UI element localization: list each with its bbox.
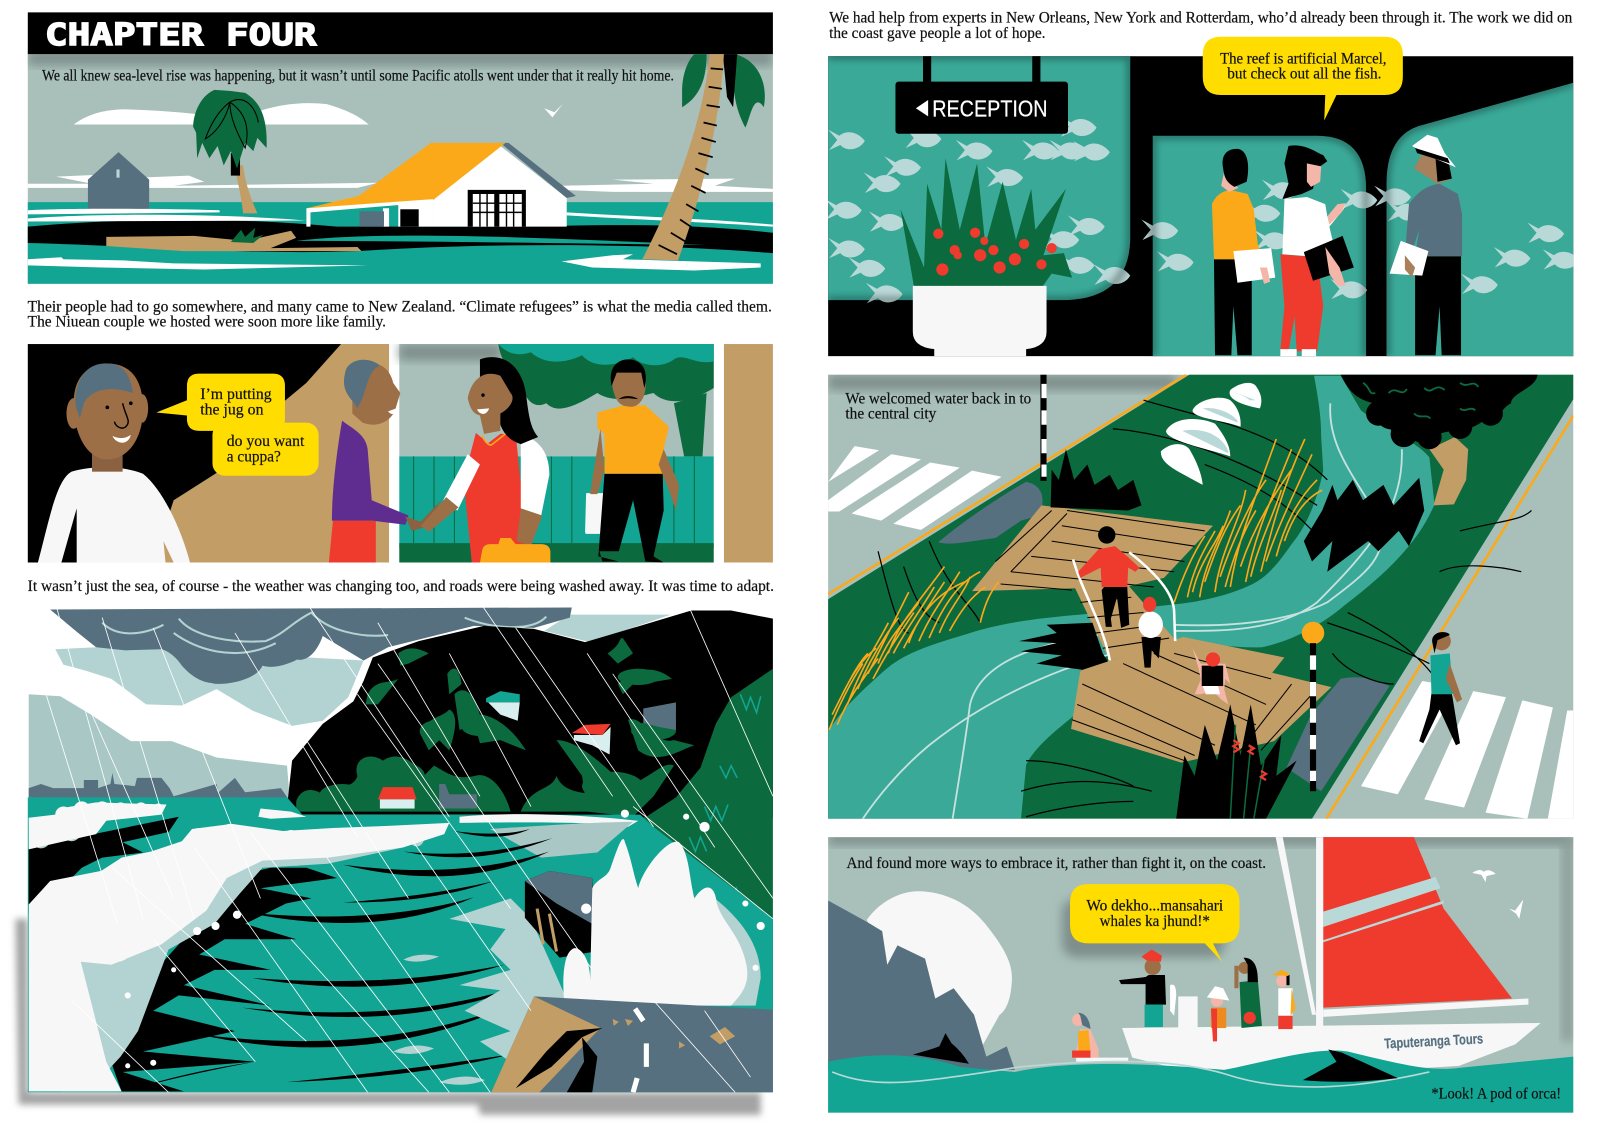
sea [28, 797, 773, 1092]
boy in yellow cap [1272, 970, 1296, 1029]
large palm tree [642, 54, 765, 260]
kitchen wall [153, 344, 389, 563]
tree [1341, 375, 1538, 505]
reception sign: RECEPTION [932, 95, 1048, 121]
caption: embrace it: And found more ways to embrace it, rather than fight it, on the coast. [846, 855, 1266, 872]
winding river [828, 376, 1434, 819]
caption: help from experts: the coast gave people a lot of hope. [829, 25, 1046, 42]
seagulls [1472, 870, 1523, 919]
chapter title [28, 12, 773, 54]
pale sea foam [393, 898, 572, 1092]
bush foliage [296, 638, 694, 817]
woman in purple [329, 360, 441, 563]
speech bubble: orca pod: whales ka jhund!* [1100, 913, 1210, 930]
flood current [28, 220, 773, 253]
panel: hosting the Niuean couple [28, 344, 773, 563]
fish school [825, 116, 1579, 303]
rain streaks [46, 602, 773, 1092]
toddler [1193, 648, 1230, 704]
sail and rigging [1275, 835, 1528, 1031]
moon [867, 891, 1012, 1052]
city skyline [29, 773, 290, 801]
river current lines [863, 403, 1402, 819]
caption: time to adapt: It wasn’t just the sea, of course - the weather was changing too, and roads were being washed away. It was time to adapt. [28, 578, 774, 595]
speech bubble: putting the jug on: I’m putting [200, 386, 272, 403]
stormwater ponds [938, 482, 1390, 791]
street bollards [1040, 375, 1324, 791]
chapter title: CHAPTER FOUR [45, 18, 317, 53]
white door frames [389, 344, 390, 562]
man in white hat [1390, 135, 1462, 355]
man in orange shirt [1212, 149, 1275, 355]
caption: help from experts: We had help from experts in New Orleans, New York and Rotterdam, who’d already been through it. The work we did on [829, 9, 1573, 26]
green park [828, 375, 1573, 819]
golden grasses [829, 439, 1322, 730]
panel: water in the central city [828, 375, 1573, 819]
reception sign [895, 56, 1068, 134]
panel: artificial reef reception [825, 56, 1579, 356]
caption: sea-level rise: We all knew sea-level rise was happening, but it wasn’t until some Pacific atolls went under that it really hit home. [42, 68, 674, 85]
right orca [1303, 1049, 1398, 1082]
caption: welcomed water back: the central city [845, 406, 937, 423]
speech bubble: artificial reef: but check out all the fish. [1227, 66, 1381, 83]
speech bubble: cuppa [212, 423, 319, 476]
aquarium windows [828, 56, 1573, 356]
hillside houses [378, 691, 676, 809]
child in white [1138, 597, 1163, 668]
caption: welcomed water back: We welcomed water back in to [845, 390, 1032, 407]
woman in green [1234, 958, 1262, 1028]
panel: coastal orca tour [828, 833, 1573, 1113]
green shore hillside [644, 669, 773, 1010]
sea spray [125, 810, 765, 1068]
flooded house [306, 143, 576, 227]
shore foam [258, 809, 638, 827]
kerb lines [828, 375, 1573, 819]
panel shadow: storm [15, 919, 761, 1115]
white foam crests [29, 801, 449, 1091]
boardwalk [972, 505, 1331, 763]
man in red shirt [1078, 526, 1139, 628]
pointing guide [1119, 949, 1176, 1027]
speech bubble: orca pod: Wo dekho...mansahari [1086, 898, 1223, 915]
wave splash [563, 839, 761, 1006]
garden background [399, 344, 714, 563]
blue house [88, 152, 149, 211]
panel: storm [28, 602, 773, 1092]
lower crossing [1361, 681, 1573, 819]
man in orange shirt [585, 359, 679, 563]
water [28, 202, 773, 284]
black headland [287, 611, 773, 818]
rocky peaks [828, 900, 1015, 1070]
caption: climate refugees: Their people had to go somewhere, and many came to New Zealand. “Climate refugees” is what the media called them. [28, 298, 772, 315]
caption: welcomed water back [845, 390, 1032, 423]
potted plant [901, 158, 1072, 356]
distant mountain [29, 694, 290, 801]
caption: climate refugees [28, 298, 772, 331]
flowering flax [1176, 704, 1297, 819]
black river reeds [1019, 478, 1424, 670]
window edge shading [828, 56, 1573, 356]
white sculpture petals [1161, 383, 1261, 485]
horizon surf [28, 175, 773, 192]
woman by the water [1072, 1013, 1099, 1058]
fallen log [106, 228, 362, 251]
panel: sea-level rise [28, 12, 773, 284]
bubble shadow [1062, 898, 1225, 958]
boat: Taputeranga Tours [1384, 1031, 1484, 1052]
walker [1419, 632, 1462, 745]
man in white shirt [38, 363, 190, 563]
woman in red dress [421, 357, 550, 563]
speech bubble: artificial reef [1203, 37, 1403, 120]
speech bubble: putting the jug on [156, 374, 285, 431]
black shrub near deck [1051, 449, 1141, 510]
grass blade strokes [878, 400, 1531, 817]
storm clouds [50, 607, 671, 726]
left orca [913, 1033, 969, 1064]
speech bubble: putting the jug on: the jug on [200, 401, 264, 418]
black wave [29, 817, 552, 1092]
woman in white shirt [1280, 145, 1354, 356]
clouds [74, 103, 369, 125]
bird [544, 104, 563, 117]
caption: climate refugees: The Niuean couple we hosted were soon more like family. [28, 314, 386, 331]
speech bubble: orca pod [1070, 884, 1240, 962]
caption: help from experts [829, 9, 1573, 42]
speech bubble: cuppa: a cuppa? [227, 448, 281, 465]
upper crossing [828, 446, 1002, 530]
broken road [491, 996, 773, 1092]
speech bubble: artificial reef: The reef is artificial Marcel, [1220, 50, 1387, 67]
sea waves [828, 1051, 1573, 1113]
footnote: *Look! A pod of orca! [1431, 1085, 1561, 1102]
boat [1076, 996, 1541, 1080]
surf foam [28, 254, 761, 271]
broken pier [525, 871, 595, 958]
small palm tree [193, 90, 267, 213]
child in white hat [1207, 986, 1229, 1041]
speech bubble: cuppa: do you want [227, 433, 305, 450]
